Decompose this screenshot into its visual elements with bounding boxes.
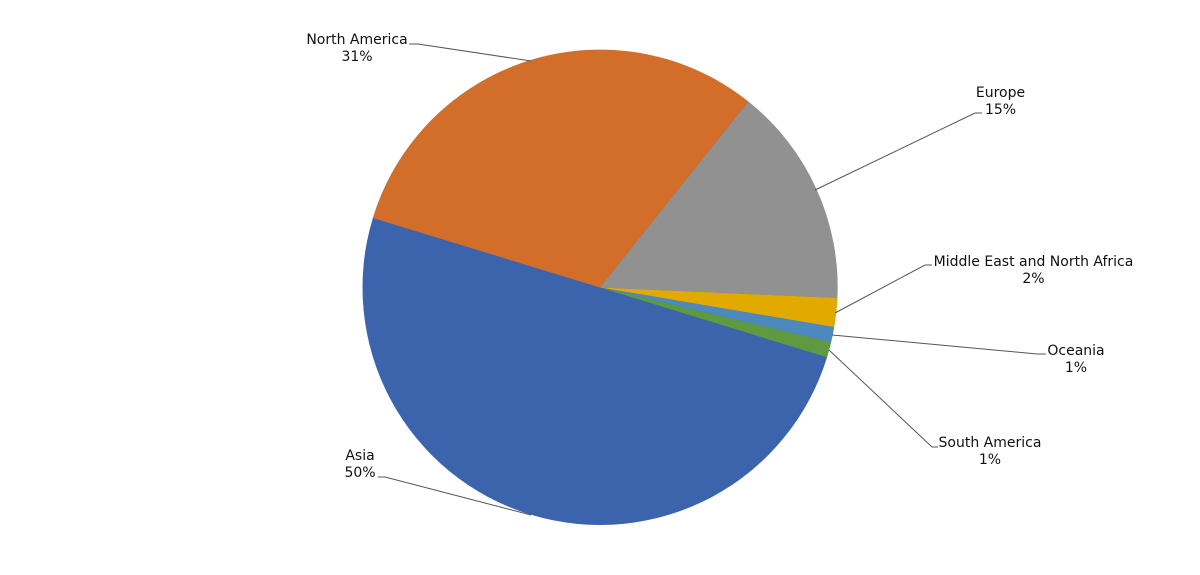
slice: Middle East and North Africa bbox=[600, 288, 837, 327]
leader line: Middle East and North Africa bbox=[835, 265, 932, 313]
label: Asia: 50% bbox=[344, 465, 376, 481]
label: Oceania: 1% bbox=[1065, 360, 1087, 376]
label: South America: 1% bbox=[979, 452, 1001, 468]
label: Asia: Asia bbox=[345, 448, 375, 464]
slice: North America bbox=[373, 50, 748, 287]
leader line: Europe bbox=[815, 113, 982, 190]
label: North America: 31% bbox=[341, 49, 373, 65]
leader line: Asia bbox=[378, 477, 531, 515]
label: Middle East and North Africa: 2% bbox=[1022, 271, 1045, 287]
label: North America: North America bbox=[306, 32, 408, 48]
slice: Asia bbox=[362, 50, 838, 525]
leader line: Oceania bbox=[832, 335, 1046, 354]
leader line: North America bbox=[409, 44, 531, 61]
label: Middle East and North Africa: Middle East and North Africa bbox=[934, 254, 1133, 270]
label: South America: South America bbox=[939, 435, 1041, 451]
label: Oceania: Oceania bbox=[1047, 343, 1105, 359]
slice: South America bbox=[600, 288, 831, 357]
label: Europe: Europe bbox=[976, 85, 1025, 101]
leader line: South America bbox=[829, 350, 938, 447]
label: Europe: 15% bbox=[985, 102, 1016, 118]
slice: Oceania bbox=[600, 288, 834, 342]
slice: Europe bbox=[600, 102, 838, 298]
